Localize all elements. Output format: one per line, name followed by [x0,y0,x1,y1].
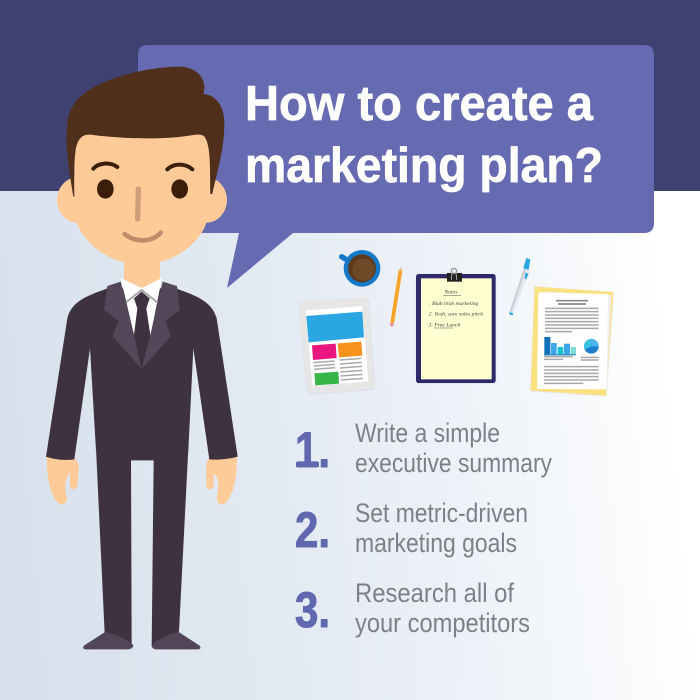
handwritten notes: Notes [443,289,458,295]
step 2 [295,498,528,558]
step 2: 2. [295,502,330,558]
icon: tablet [299,297,375,394]
speech bubble [138,45,654,288]
left hand [47,457,79,504]
icon: coffee cup [342,250,380,287]
handwritten notes: 3. Free Lunch [428,323,461,329]
desk items [299,250,613,396]
title [245,77,603,193]
title: marketing plan? [245,139,603,193]
pie chart [584,339,599,354]
neck [124,260,160,290]
nose [130,189,146,219]
handwritten notes [428,289,483,329]
left lapel [104,282,142,369]
step 3: your competitors [355,608,530,638]
businessman head [57,67,227,264]
left eyebrow [93,164,117,169]
step 1 [295,418,552,478]
right shoe [152,632,200,649]
handwritten notes: : Blah blah marketing [429,301,479,307]
title: How to create a [245,77,594,131]
left ear [57,177,98,223]
collar line [126,290,158,303]
icon: pen [509,258,530,315]
left shoe [83,632,133,649]
step 3 [295,578,530,638]
jacket [46,288,238,460]
top dark band [0,0,700,191]
step 3: Research all of [355,578,514,608]
step 3: 3. [295,582,330,638]
tie [134,292,150,366]
right ear [186,177,227,223]
right hand [206,457,237,504]
step 1: Write a simple [355,418,500,448]
hair [67,67,224,197]
mouth [125,233,161,240]
bar chart [544,337,576,355]
right eyebrow [167,165,192,169]
handwritten notes: 2. Yeah, sure sales pitch [429,312,483,318]
step 1: executive summary [355,448,552,478]
icon: pencil [390,267,402,327]
icon: report folder [531,287,613,396]
trousers [96,448,188,647]
shirt [121,278,162,352]
icon: clipboard [416,268,496,383]
step 1: 1. [295,422,330,478]
right eye [171,179,188,199]
step 2: Set metric-driven [355,498,528,528]
face [74,133,210,264]
businessman body [46,260,238,649]
left eye [97,179,114,199]
right lapel [142,282,180,369]
step 2: marketing goals [355,528,517,558]
